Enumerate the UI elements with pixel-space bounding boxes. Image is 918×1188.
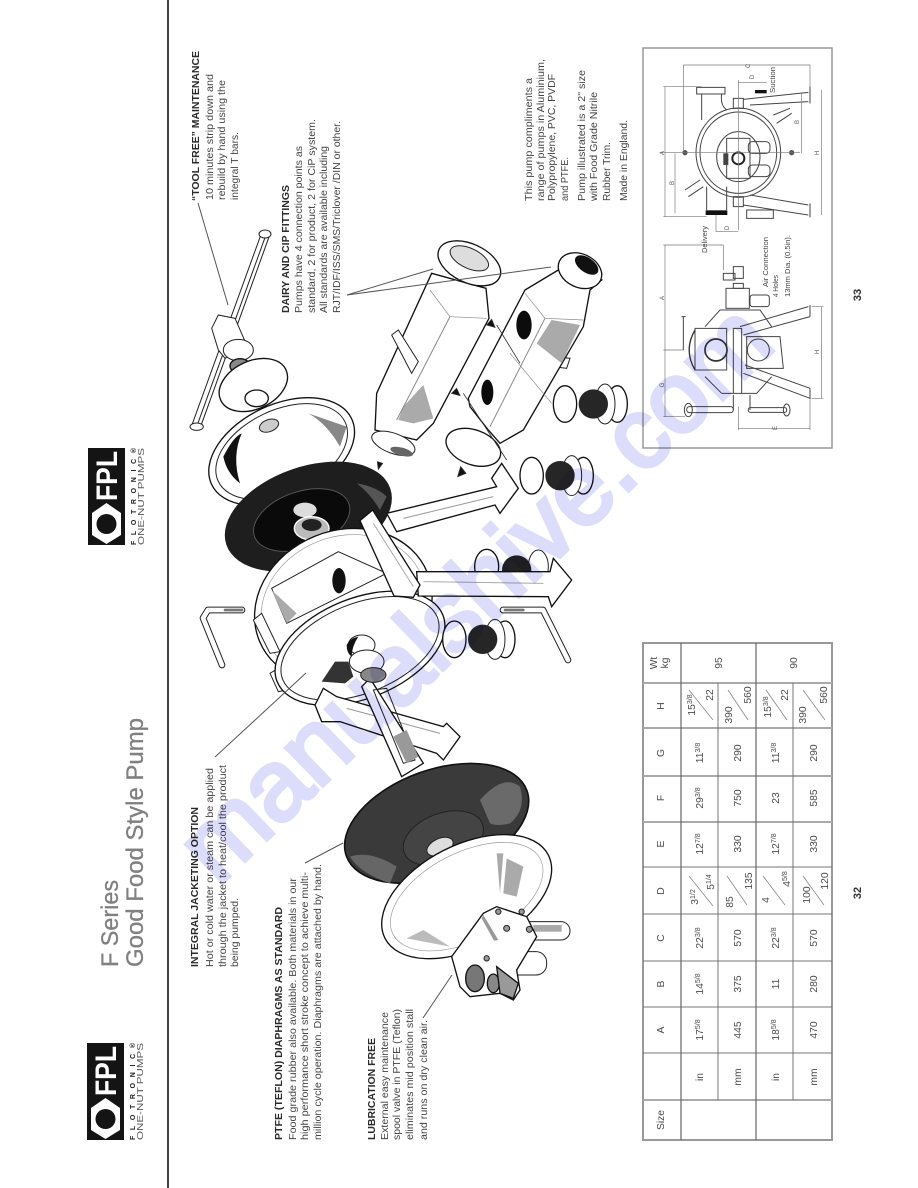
row: inches, model 1: 7/8	[695, 833, 702, 843]
row: inches, model 2: in	[771, 1073, 782, 1081]
row: inches, model 1: 3	[690, 899, 701, 905]
row: inches, model 2: 5/8	[771, 1019, 778, 1029]
row: inches, model 1: 3/8	[687, 694, 694, 704]
lower manifold	[441, 246, 608, 473]
drawing labels: D	[725, 225, 731, 230]
table header row: A	[656, 1026, 667, 1033]
drawing labels: B	[670, 181, 676, 185]
row: millimetres, model 1	[724, 686, 755, 1086]
row: inches, model 1: 3/8	[695, 743, 702, 753]
row: inches, model 2	[761, 689, 793, 1081]
table header row: F	[656, 795, 667, 801]
weights	[714, 657, 800, 669]
row: millimetres, model 1: 570	[733, 929, 744, 947]
text block: dairy and CIP fittings	[281, 119, 343, 313]
row: inches, model 1: 3/8	[695, 927, 702, 937]
row: inches, model 2: 12	[771, 843, 782, 855]
row: millimetres, model 1: 330	[733, 835, 744, 853]
text block: pump range notes: Pump illustrated is a 2" size	[577, 70, 588, 201]
spool valve	[452, 907, 537, 1000]
logo: FPL Flotronic, right page: FPL	[91, 451, 124, 501]
drawing labels: Delivery	[700, 226, 709, 253]
drawing labels: B	[795, 120, 801, 124]
text block: PTFE diaphragms: Food grade rubber also available. Both materials in our	[288, 877, 299, 1140]
drawing labels: D	[750, 74, 756, 79]
leg with foot, upper	[387, 463, 518, 532]
text block: lubrication free: spool valve in PTFE (Teflon)	[392, 1009, 403, 1140]
drawing labels: Air Connection	[761, 237, 770, 287]
table header row: Wt	[649, 657, 660, 669]
text block: integral jacketing option: through the jacket to heat/cool the product	[218, 765, 229, 967]
text block: tool free maintenance: rebuild by hand using the	[217, 80, 228, 200]
text block: lubrication free: and runs on dry clean air.	[419, 1020, 430, 1140]
chamber cover	[192, 376, 372, 527]
row: inches, model 2: 11	[771, 753, 782, 763]
row: millimetres, model 2: mm	[809, 1068, 820, 1086]
row: inches, model 2: 3/8	[771, 927, 778, 937]
row: millimetres, model 1: 445	[733, 1021, 744, 1039]
text block: pump range notes: Made in England.	[619, 120, 630, 201]
row: millimetres, model 1: 85	[725, 896, 736, 908]
row: inches, model 1: 17	[695, 1029, 706, 1041]
text block: pump range notes: This pump compliments a	[524, 78, 535, 201]
text block: lubrication free: External easy maintenance	[380, 1012, 391, 1140]
valve set 4	[443, 619, 515, 659]
text block: pump range notes: Polypropylene, PVC, PVDF	[547, 74, 558, 201]
row: millimetres, model 2: 390	[798, 706, 809, 724]
row: millimetres, model 2: 100	[802, 886, 813, 904]
row: inches, model 2: 5/8	[782, 871, 789, 881]
text block: tool free maintenance: integral T bars.	[230, 132, 241, 200]
row: inches, model 1: 29	[695, 797, 706, 809]
drawing labels: C	[746, 63, 752, 68]
logo: FPL Flotronic, left page: FLOTRONIC®	[129, 1042, 137, 1140]
title: Good Food Style Pump	[122, 718, 149, 967]
table header row: G	[656, 749, 667, 757]
text block: PTFE diaphragms: million cycle operation. Diaphragms are attached by hand.	[313, 864, 324, 1140]
row: inches, model 1: 1/2	[690, 889, 697, 899]
drawing labels: A	[660, 151, 666, 155]
row: millimetres, model 2: 290	[809, 744, 820, 762]
row: millimetres, model 1: 375	[733, 975, 744, 993]
text block: integral jacketing option: Hot or cold water or steam can be applied	[205, 768, 216, 967]
watermark: manualshive.com	[155, 282, 793, 903]
leg with foot and crossbar	[360, 510, 572, 607]
centre frame: front ring	[258, 569, 462, 728]
row: inches, model 1: 15	[687, 704, 698, 716]
drawing labels: H	[815, 350, 821, 354]
row: inches, model 1: 22	[695, 937, 706, 949]
row: millimetres, model 2: 570	[809, 929, 820, 947]
row: inches, model 1: 12	[695, 843, 706, 855]
diaphragm	[210, 441, 407, 592]
row: inches, model 1: 11	[695, 753, 706, 763]
text block: dairy and CIP fittings: RJT/IDF/ISS/SMS/Triclover /DIN or other.	[332, 121, 343, 313]
table header row: kg	[660, 657, 671, 668]
table header row: C	[656, 934, 667, 942]
text block: tool free maintenance	[191, 51, 241, 201]
chamber cover	[362, 809, 572, 984]
page number 33: 33	[852, 289, 864, 301]
logo: FPL Flotronic, right page	[88, 447, 146, 545]
row: inches, model 2: 4	[761, 897, 772, 903]
weights: 90	[789, 657, 800, 669]
text block: pump range notes: with Food Grade Nitrile	[589, 92, 600, 202]
row: millimetres, model 1: mm	[733, 1068, 744, 1086]
drawing labels: Suction	[768, 67, 777, 93]
centre frame: rear ring and window	[231, 502, 456, 711]
text block: PTFE diaphragms: PTFE (TEFLON) DIAPHRAGMS AS STANDARD	[274, 907, 285, 1140]
table header row: E	[656, 840, 667, 847]
row: millimetres, model 2: 330	[809, 835, 820, 853]
text block: tool free maintenance: 10 minutes strip down and	[205, 74, 216, 200]
text block: dairy and CIP fittings: DAIRY AND CIP FITTINGS	[281, 185, 292, 313]
row: millimetres, model 1: 290	[733, 744, 744, 762]
row: inches, model 2: 18	[771, 1029, 782, 1041]
row: inches, model 2: 22	[771, 937, 782, 949]
drawing: end view	[660, 65, 823, 430]
row: millimetres, model 2: 470	[809, 1021, 820, 1039]
row: inches, model 1: 5/8	[695, 973, 702, 983]
drawing labels: G	[660, 382, 666, 387]
table header row: Size	[656, 1110, 667, 1130]
assembly arrows	[377, 319, 520, 477]
row: inches, model 1: 5/8	[695, 1019, 702, 1029]
row: inches, model 2: 22	[780, 689, 791, 701]
hex key, left	[203, 610, 242, 665]
row: inches, model 1: 5	[706, 884, 717, 890]
row: inches, model 2: 15	[763, 706, 774, 718]
row: inches, model 1: 14	[695, 983, 706, 995]
valve set 2	[520, 456, 593, 496]
row: inches, model 2: 7/8	[771, 833, 778, 843]
text block: tool free maintenance: “TOOL FREE” MAINTENANCE	[191, 51, 202, 201]
logo: FPL Flotronic, right page: FLOTRONIC®	[130, 447, 138, 545]
row: inches, model 1	[687, 689, 717, 1081]
table header row: D	[656, 887, 667, 895]
row: inches, model 1: 22	[705, 689, 716, 701]
exploded pump illustration: lower half	[315, 635, 572, 1000]
valve set 3 (behind frame)	[475, 549, 548, 585]
upper manifold	[369, 232, 508, 460]
row: inches, model 1: 3/8	[695, 787, 702, 797]
row: millimetres, model 2: 585	[809, 789, 820, 807]
air cylinders	[507, 922, 570, 975]
text block: lubrication free: LUBRICATION FREE	[367, 1038, 378, 1140]
row: millimetres, model 2	[798, 686, 831, 1086]
T-bar handle	[190, 230, 296, 430]
logo: FPL Flotronic, left page: FPL	[90, 1046, 123, 1096]
drawing labels: A	[660, 296, 666, 300]
exploded pump illustration: upper half	[190, 230, 627, 728]
row: inches, model 1: in	[695, 1073, 706, 1081]
row: millimetres, model 1: 135	[744, 872, 755, 890]
text block: dairy and CIP fittings: Pumps have 4 connection points as	[294, 146, 305, 313]
diaphragm	[328, 740, 545, 906]
row: millimetres, model 1: 560	[743, 686, 754, 704]
text block: pump range notes: Rubber Trim.	[602, 142, 613, 201]
logo: FPL Flotronic, right page: ONE-NUT PUMPS	[136, 448, 146, 545]
text block: lubrication free	[367, 1009, 430, 1140]
text block: pump range notes: and PTFE.	[560, 157, 571, 201]
row: millimetres, model 1: 750	[733, 789, 744, 807]
row: inches, model 1: 1/4	[706, 874, 713, 884]
row: inches, model 2: 3/8	[771, 743, 778, 753]
dimensional table	[643, 643, 832, 1140]
text block: dairy and CIP fittings: standard, 2 for product, 2 for CiP system.	[307, 119, 318, 313]
title: F Series	[97, 880, 124, 967]
logo: FPL Flotronic, left page	[87, 1042, 145, 1140]
row: millimetres, model 1: 390	[724, 706, 735, 724]
table header row: B	[656, 980, 667, 987]
text block: pump range notes	[524, 59, 630, 202]
text block: integral jacketing option: INTEGRAL JACKETING OPTION	[190, 807, 201, 967]
drawing labels: 13mm Dia. (0.5in).	[783, 235, 792, 297]
text block: PTFE diaphragms	[274, 864, 324, 1140]
valve set 1	[553, 384, 627, 424]
leader lines	[198, 203, 551, 1018]
connecting rod, nut and lower leg	[315, 635, 460, 777]
weights: 95	[714, 657, 725, 669]
drawing labels: 4 Holes	[771, 275, 780, 297]
title	[97, 718, 149, 967]
page number 32: 32	[852, 887, 864, 899]
drawing labels: H	[815, 151, 821, 155]
table header row	[649, 657, 671, 1130]
text block: pump range notes: range of pumps in Aluminium,	[536, 59, 547, 201]
logo: FPL Flotronic, left page: ONE-NUT PUMPS	[135, 1043, 145, 1140]
row: millimetres, model 2: 120	[820, 872, 831, 890]
panel: dimensioned drawing	[643, 48, 832, 448]
text block: PTFE diaphragms: high performance short stroke concept to achieve multi-	[300, 872, 311, 1140]
row: inches, model 2: 11	[771, 978, 782, 989]
text block: dairy and CIP fittings: All standards are available including	[319, 146, 330, 313]
text block: integral jacketing option	[190, 765, 241, 967]
table grid	[643, 643, 832, 1140]
row: inches, model 2: 4	[782, 881, 793, 887]
text block: integral jacketing option: being pumped.	[230, 898, 241, 967]
drawing labels	[660, 63, 821, 430]
row: inches, model 2: 23	[771, 792, 782, 804]
drawing labels: E	[773, 426, 779, 430]
row: millimetres, model 2: 280	[809, 975, 820, 993]
table header row: H	[656, 702, 667, 710]
hex key, right	[503, 610, 568, 660]
text block: lubrication free: eliminates mid position stall	[405, 1009, 416, 1140]
row: inches, model 2: 3/8	[763, 696, 770, 706]
row: millimetres, model 2: 560	[819, 686, 830, 704]
